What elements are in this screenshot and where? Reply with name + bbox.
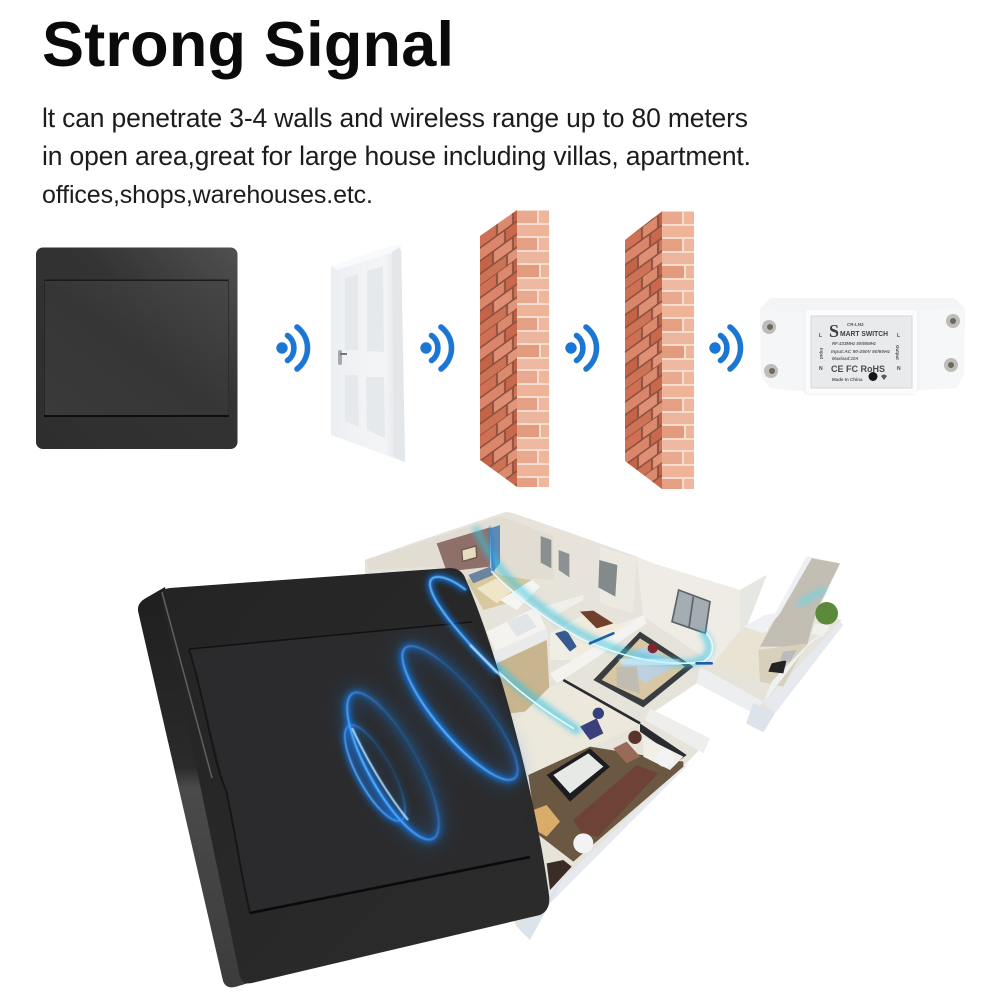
smart switch module: L: [819, 333, 822, 339]
smart switch module: Output: [895, 345, 900, 360]
smart switch module: Made In China: [832, 377, 863, 382]
smart switch module: Maxload:10A: [832, 356, 859, 361]
back walls and rooms: [365, 517, 840, 703]
smart switch module: CE FC RoHS: [831, 364, 885, 374]
brick wall 2: [625, 211, 694, 489]
smart switch module: N: [897, 366, 901, 372]
title: Strong Signal: [42, 10, 454, 80]
description text: lt can penetrate 3-4 walls and wireless range up to 80 meters: [42, 103, 748, 133]
description text: [42, 103, 751, 209]
kitchen tower: [760, 558, 840, 647]
smart switch module: CR-LN3: [847, 322, 864, 327]
icon: wifi signal 3: [565, 327, 596, 369]
outer wall bands: [517, 622, 843, 940]
icon: black wall switch: [36, 248, 238, 449]
icon: wifi signal 2: [420, 327, 452, 369]
smart switch module: Input:AC 90-250V 50/60Hz: [831, 349, 891, 354]
smart switch module: RF:433MHz 50/60MHz: [832, 341, 877, 346]
dining area: [593, 632, 693, 707]
tiled floor: [513, 682, 640, 775]
icon: white door: [331, 243, 405, 462]
smart switch module: Input: [819, 348, 824, 359]
switch side edge: [138, 587, 252, 987]
icon: wifi signal 1: [276, 327, 308, 369]
switch front plate: [161, 568, 549, 983]
smart switch module: L: [897, 333, 900, 339]
smart switch module: [760, 298, 965, 395]
switch rocker: [189, 622, 531, 913]
blue signal streaks: [477, 528, 823, 730]
blue spiral glow: [331, 577, 533, 851]
icon: wifi signal 4: [709, 327, 740, 369]
smart switch module: MART SWITCH: [840, 329, 888, 338]
description text: offices,shops,warehouses.etc.: [42, 181, 373, 209]
smart switch module: S: [829, 321, 839, 341]
large black switch with blue signal: [138, 568, 549, 987]
brick wall 1: [480, 210, 549, 487]
building silhouette: [365, 512, 842, 940]
bedrooms and bath: [467, 567, 647, 713]
smart switch module: N: [819, 366, 823, 372]
floor plan illustration: [365, 512, 843, 940]
living room: [528, 708, 687, 890]
description text: in open area,great for large house including villas, apartment.: [42, 141, 751, 171]
